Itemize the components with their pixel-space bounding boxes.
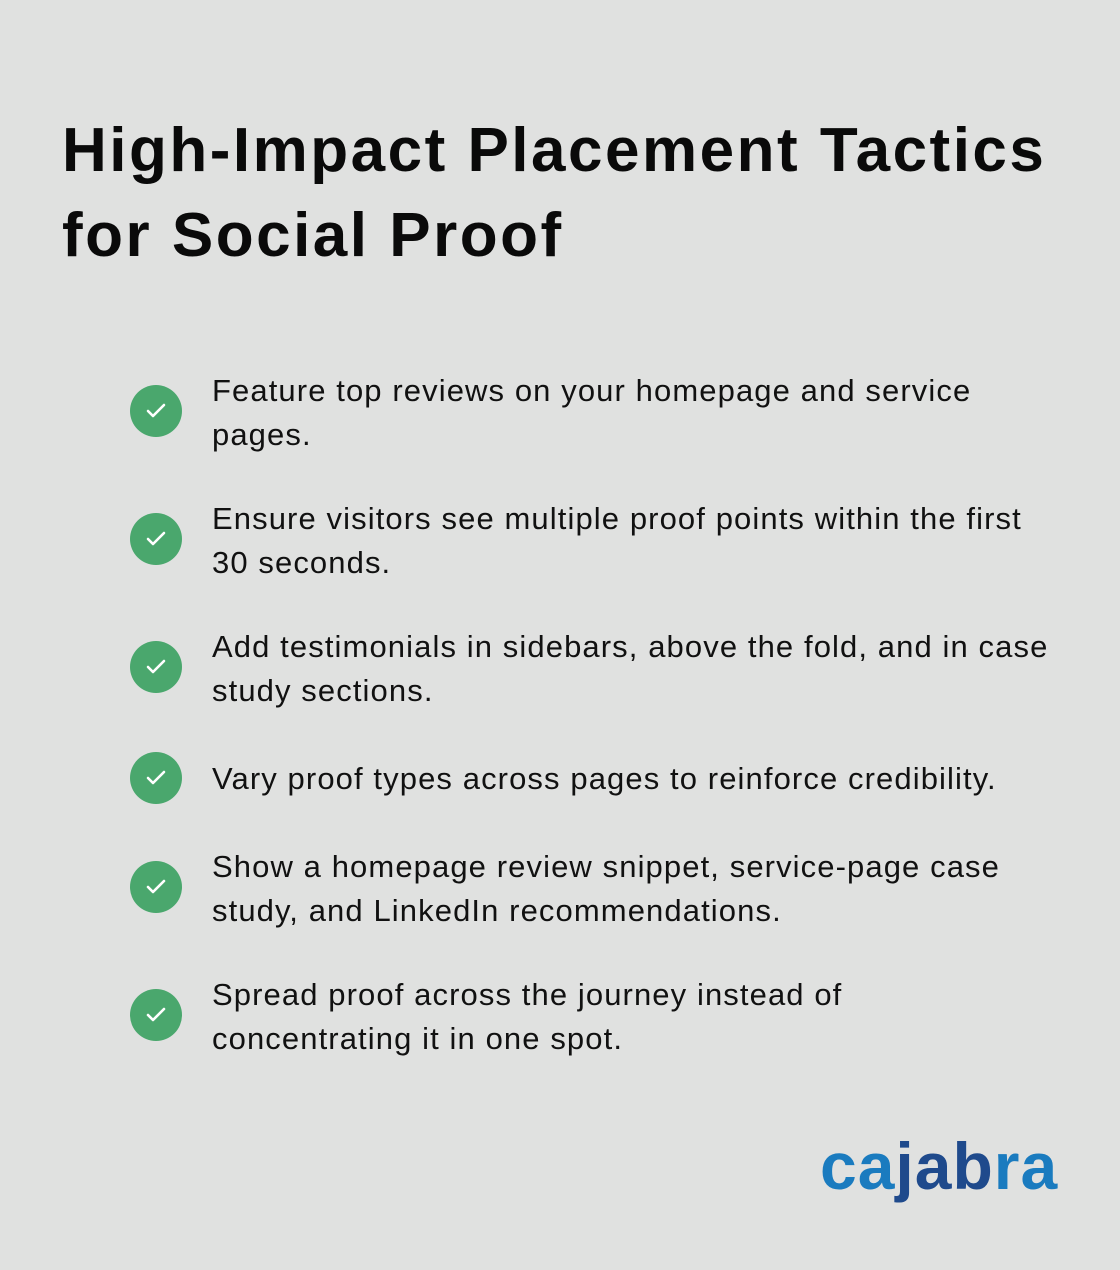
text: Add testimonials in sidebars, above the fold, and in case — [212, 629, 1048, 664]
logo: cajabra — [820, 1129, 1058, 1203]
text: Vary proof types across pages to reinforce credibility. — [212, 761, 997, 796]
icon: check — [130, 989, 182, 1041]
icon: check — [130, 861, 182, 913]
text — [212, 849, 1000, 928]
text: Feature top reviews on your homepage and service — [212, 373, 971, 408]
text: pages. — [212, 417, 312, 452]
icon: check — [130, 513, 182, 565]
item 2 — [130, 501, 1022, 580]
title — [62, 116, 1046, 270]
text: Ensure visitors see multiple proof points within the first — [212, 501, 1022, 536]
text: study sections. — [212, 673, 434, 708]
icon: check — [130, 752, 182, 804]
item 5 — [130, 849, 1000, 928]
item 4 — [130, 752, 997, 804]
text: Spread proof across the journey instead of — [212, 977, 842, 1012]
title: High-Impact Placement Tactics — [62, 116, 1046, 185]
item 6 — [130, 977, 842, 1056]
text — [212, 373, 971, 452]
icon: check — [130, 385, 182, 437]
text: 30 seconds. — [212, 545, 391, 580]
icon: check — [130, 641, 182, 693]
text: concentrating it in one spot. — [212, 1021, 623, 1056]
text — [212, 629, 1048, 708]
item 3 — [130, 629, 1048, 708]
item 1 — [130, 373, 971, 452]
text — [212, 977, 842, 1056]
title: for Social Proof — [62, 201, 564, 270]
text: Show a homepage review snippet, service-page case — [212, 849, 1000, 884]
text: study, and LinkedIn recommendations. — [212, 893, 782, 928]
text — [212, 501, 1022, 580]
